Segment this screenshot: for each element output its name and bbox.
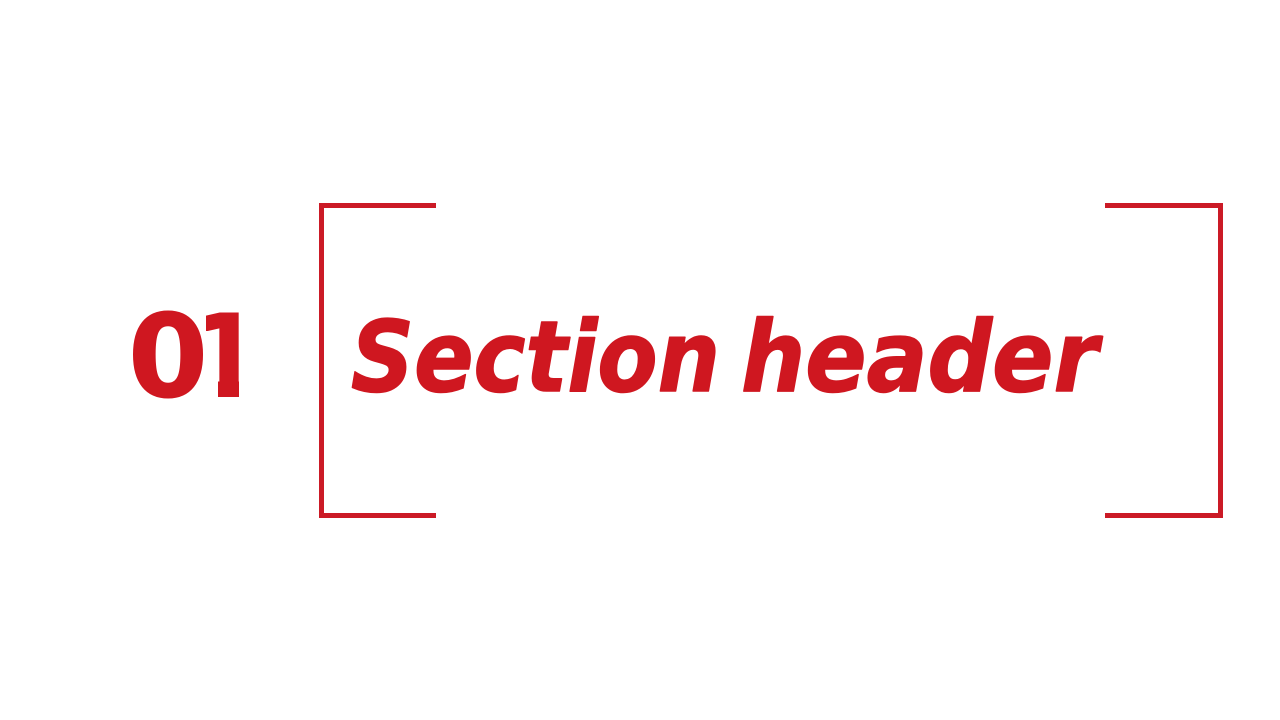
section number: 0	[128, 290, 208, 424]
right bracket	[1105, 206, 1220, 516]
section title	[351, 301, 1103, 415]
section title: Section	[351, 301, 720, 415]
section number: 1	[190, 290, 263, 424]
left bracket	[322, 206, 436, 516]
section title: header	[741, 301, 1103, 415]
section number	[133, 310, 239, 398]
